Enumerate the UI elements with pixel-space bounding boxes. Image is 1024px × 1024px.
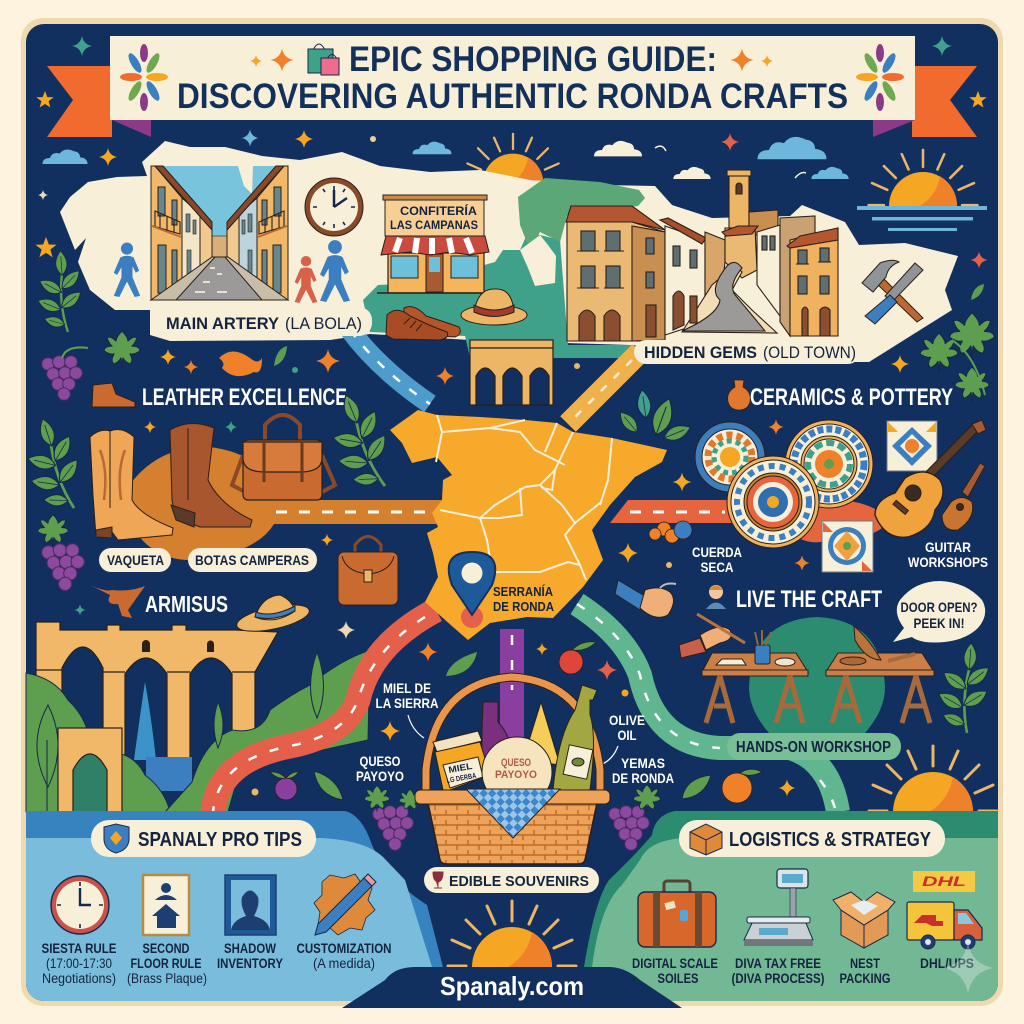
tip: siesta rule: Negotiations) bbox=[42, 971, 116, 986]
icon: orange bbox=[722, 769, 762, 803]
painter hand bbox=[679, 614, 745, 658]
heading pill: spanaly pro tips bbox=[91, 820, 316, 857]
basket rim bbox=[415, 790, 610, 804]
gift basket bbox=[415, 677, 610, 864]
road: red bbox=[213, 610, 436, 812]
tip: second floor rule: (Brass Plaque) bbox=[127, 971, 207, 986]
grape clusters near basket bbox=[364, 784, 660, 850]
icon and label: nest packing box: NEST bbox=[850, 956, 881, 971]
tip: customization: (A medida) bbox=[313, 956, 375, 971]
label: guitar workshops: GUITAR bbox=[925, 539, 971, 555]
icon and label: diva tax free scale: DIVA TAX FREE bbox=[735, 956, 821, 971]
icon: adult pedestrian bbox=[320, 240, 350, 302]
label: cuerda seca: SECA bbox=[700, 559, 734, 575]
left floral ornament bbox=[120, 44, 168, 111]
left workbench bbox=[702, 630, 808, 723]
right title ribbon bbox=[873, 66, 977, 137]
leaf left of basket bbox=[314, 771, 343, 800]
title text: EPIC SHOPPING GUIDE: bbox=[349, 40, 717, 79]
bottom right panel: logistics bbox=[584, 811, 998, 1008]
cream clearing in the hill bbox=[520, 235, 556, 286]
small leaf right bbox=[971, 284, 984, 300]
illustration: confiteria shop bbox=[377, 195, 490, 293]
illustration: confiteria shop: CONFITERÍA bbox=[400, 203, 477, 218]
icon: wall clock bbox=[305, 178, 363, 236]
label: queso payoyo bbox=[356, 753, 404, 784]
label: yemas de ronda: DE RONDA bbox=[612, 770, 674, 786]
label: edible souvenirs bbox=[424, 867, 599, 893]
illustration: brown cowboy boot bbox=[170, 423, 252, 527]
leaf right of basket bbox=[682, 775, 711, 799]
label: serrania de ronda: DE RONDA bbox=[493, 599, 555, 614]
icon: apple bbox=[559, 642, 596, 674]
ceramic tiles bbox=[822, 421, 937, 572]
label: yemas de ronda bbox=[612, 755, 674, 786]
tip: siesta rule bbox=[42, 876, 116, 986]
tip: customization bbox=[296, 874, 392, 971]
icon and label: digital scale soiles suitcase: DIGITAL SCALE bbox=[632, 956, 718, 971]
wine bottle bbox=[482, 702, 510, 775]
illustration: leather handbag bbox=[232, 415, 335, 500]
olive oil bottle bbox=[553, 685, 597, 790]
right workbench bbox=[826, 626, 934, 723]
road: green bbox=[577, 604, 838, 812]
icon: shopping bags bbox=[308, 44, 339, 75]
tip: customization: CUSTOMIZATION bbox=[296, 941, 392, 956]
cheese wedge bbox=[523, 702, 560, 765]
road: purple bbox=[500, 629, 524, 789]
green hills: right bbox=[165, 650, 370, 812]
green hills: left bbox=[26, 673, 170, 812]
footer url plate: Spanaly.com bbox=[440, 971, 584, 1001]
callout: door open: DOOR OPEN? bbox=[900, 599, 978, 615]
label: miel de la sierra: MIEL DE bbox=[383, 680, 431, 696]
label: queso payoyo: QUESO bbox=[360, 753, 401, 769]
sun behind the map bbox=[464, 134, 562, 184]
cypress trees bbox=[37, 652, 324, 812]
green top of the hill bbox=[518, 178, 645, 250]
icon and label: nest packing box: PACKING bbox=[840, 971, 890, 986]
label: cuerda seca: CUERDA bbox=[692, 544, 742, 560]
gift basket: MIEL bbox=[448, 761, 474, 775]
label: botas camperas bbox=[188, 548, 317, 572]
icon and label: diva tax free scale: (DIVA PROCESS) bbox=[732, 971, 824, 986]
left title ribbon bbox=[47, 66, 151, 137]
illustration: tan cowboy boot bbox=[90, 429, 173, 540]
watermark sparkle bbox=[943, 943, 993, 993]
honey jar bbox=[433, 731, 482, 752]
callout: door open: PEEK IN! bbox=[914, 615, 964, 631]
heading: ceramics and pottery: CERAMICS & POTTERY bbox=[750, 384, 953, 411]
small leaf bbox=[274, 346, 287, 366]
label: serrania de ronda: SERRANÍA bbox=[493, 584, 554, 599]
decorative vine: upper left bbox=[32, 249, 140, 400]
label: hands-on workshop: HANDS-ON WORKSHOP bbox=[736, 739, 891, 756]
sun lower right bbox=[869, 746, 997, 812]
icon and label: digital scale soiles suitcase: SOILES bbox=[658, 971, 698, 986]
small stone arch bbox=[58, 728, 122, 812]
sunset over water bbox=[857, 150, 987, 231]
road: ceramics section bbox=[610, 499, 888, 542]
illustration: main artery street bbox=[151, 166, 288, 300]
tip: second floor rule bbox=[127, 875, 207, 986]
icon: plum bbox=[270, 772, 299, 800]
decorative fish bbox=[219, 352, 262, 376]
workshop scene bbox=[679, 614, 934, 733]
round cheese bbox=[482, 737, 552, 807]
label: olive oil: OIL bbox=[618, 727, 637, 743]
label: olive oil bbox=[597, 712, 645, 766]
checked cloth bbox=[466, 789, 560, 838]
label: queso payoyo: PAYOYO bbox=[356, 768, 404, 784]
icon and label: dhl ups truck: DHL/UPS bbox=[920, 956, 974, 971]
tip: siesta rule: SIESTA RULE bbox=[42, 941, 116, 956]
label: olive oil: OLIVE bbox=[609, 712, 645, 728]
title text bbox=[177, 40, 848, 116]
label: hands-on workshop bbox=[727, 733, 901, 760]
icon: leather shoes bbox=[386, 307, 460, 340]
road: leather section bbox=[120, 447, 450, 560]
label: hidden gems: HIDDEN GEMS bbox=[644, 343, 757, 362]
gift basket: PAYOYO bbox=[495, 769, 537, 781]
label: serrania de ronda bbox=[493, 584, 555, 614]
tip: shadow inventory bbox=[217, 875, 283, 971]
clouds in the sky bbox=[42, 137, 849, 179]
icon: hammer and chisel bbox=[862, 260, 923, 324]
amber road bbox=[568, 352, 640, 424]
right floral ornament bbox=[856, 44, 904, 111]
sun bottom centre bbox=[448, 901, 576, 967]
icon: small satchel bbox=[338, 536, 398, 605]
icon and label: digital scale soiles suitcase bbox=[632, 881, 718, 986]
spain map bbox=[390, 410, 667, 640]
label: cuerda seca bbox=[692, 544, 742, 575]
label: hidden gems bbox=[634, 340, 860, 364]
icon and label: diva tax free scale bbox=[732, 869, 824, 986]
label: hidden gems: (OLD TOWN) bbox=[763, 343, 856, 362]
label: yemas de ronda: YEMAS bbox=[621, 755, 665, 771]
green circle backdrop bbox=[749, 617, 885, 733]
label: guitar workshops bbox=[908, 539, 988, 570]
icon: pedestrian bbox=[114, 243, 140, 297]
heading: ceramics and pottery bbox=[728, 380, 953, 411]
heading pill: spanaly pro tips: SPANALY PRO TIPS bbox=[138, 829, 302, 851]
heading pill: logistics and strategy: LOGISTICS & STRATEGY bbox=[729, 829, 932, 851]
leaves above ceramics bbox=[616, 389, 693, 444]
heading pill: logistics and strategy bbox=[679, 820, 945, 857]
footer url plate bbox=[342, 967, 682, 1008]
ceramic plates bbox=[695, 420, 873, 548]
illustration: puente nuevo aqueduct bbox=[36, 622, 278, 791]
label: guitar workshops: WORKSHOPS bbox=[908, 554, 988, 570]
scattered sparkles and stars bbox=[35, 36, 987, 796]
icon: child pedestrian bbox=[295, 256, 317, 303]
title sparkles bbox=[250, 48, 773, 72]
label: main artery: (LA BOLA) bbox=[285, 314, 362, 333]
title text: DISCOVERING AUTHENTIC RONDA CRAFTS bbox=[177, 77, 848, 116]
decorative vine: upper right bbox=[920, 312, 994, 402]
icon and label: nest packing box bbox=[833, 892, 895, 986]
decorative sprig right bbox=[933, 641, 995, 734]
tip: siesta rule: (17:00-17:30 bbox=[46, 956, 112, 971]
river road bbox=[350, 330, 430, 404]
heading: leather excellence bbox=[92, 383, 347, 411]
top map: cream landmass bbox=[60, 141, 958, 362]
decorative sprigs and grapes: leather side bbox=[11, 386, 407, 591]
illustration: stone bridge bbox=[470, 340, 553, 405]
callout: door open bbox=[893, 581, 985, 642]
gift basket: QUESO bbox=[501, 757, 531, 769]
illustration: confiteria shop: LAS CAMPANAS bbox=[390, 218, 478, 232]
icon: straw hat bbox=[461, 289, 527, 325]
label: botas camperas: BOTAS CAMPERAS bbox=[195, 552, 309, 568]
icon and label: dhl ups truck bbox=[907, 871, 982, 971]
icon and label: dhl ups truck: DHL bbox=[922, 873, 966, 889]
label: edible souvenirs: EDIBLE SOUVENIRS bbox=[449, 873, 589, 890]
basket handle bbox=[426, 677, 600, 795]
gift basket: LG DERBA bbox=[446, 771, 477, 785]
label: main artery bbox=[150, 307, 372, 336]
map pin bbox=[449, 552, 495, 628]
illustration: old town bbox=[566, 170, 838, 341]
icon: carver hands bbox=[615, 580, 676, 617]
teal hill of the map bbox=[363, 232, 640, 358]
label: vaqueta: VAQUETA bbox=[107, 552, 164, 568]
title banner bbox=[110, 36, 915, 120]
pebbles bbox=[649, 521, 692, 543]
illustration: small guitar bbox=[942, 463, 985, 530]
heading: armisus bbox=[90, 585, 228, 618]
small leaf centre bbox=[446, 652, 477, 676]
heading: live the craft: LIVE THE CRAFT bbox=[736, 586, 882, 613]
label: vaqueta bbox=[99, 548, 171, 572]
label: main artery: MAIN ARTERY bbox=[166, 314, 280, 333]
tip: second floor rule: FLOOR RULE bbox=[130, 956, 202, 971]
heading: armisus: ARMISUS bbox=[145, 591, 228, 617]
heading: leather excellence: LEATHER EXCELLENCE bbox=[142, 384, 347, 411]
label: miel de la sierra bbox=[376, 680, 438, 738]
tip: shadow inventory: SHADOW bbox=[224, 941, 276, 956]
tip: second floor rule: SECOND bbox=[142, 941, 190, 956]
basket body bbox=[428, 803, 597, 864]
label: miel de la sierra: LA SIERRA bbox=[376, 695, 438, 711]
heading: live the craft bbox=[706, 585, 882, 613]
icon: straw hat on bridge bbox=[235, 595, 311, 636]
tip: shadow inventory: INVENTORY bbox=[217, 956, 283, 971]
bottom left panel: pro tips bbox=[26, 811, 443, 1008]
illustration: guitar bbox=[875, 420, 986, 537]
